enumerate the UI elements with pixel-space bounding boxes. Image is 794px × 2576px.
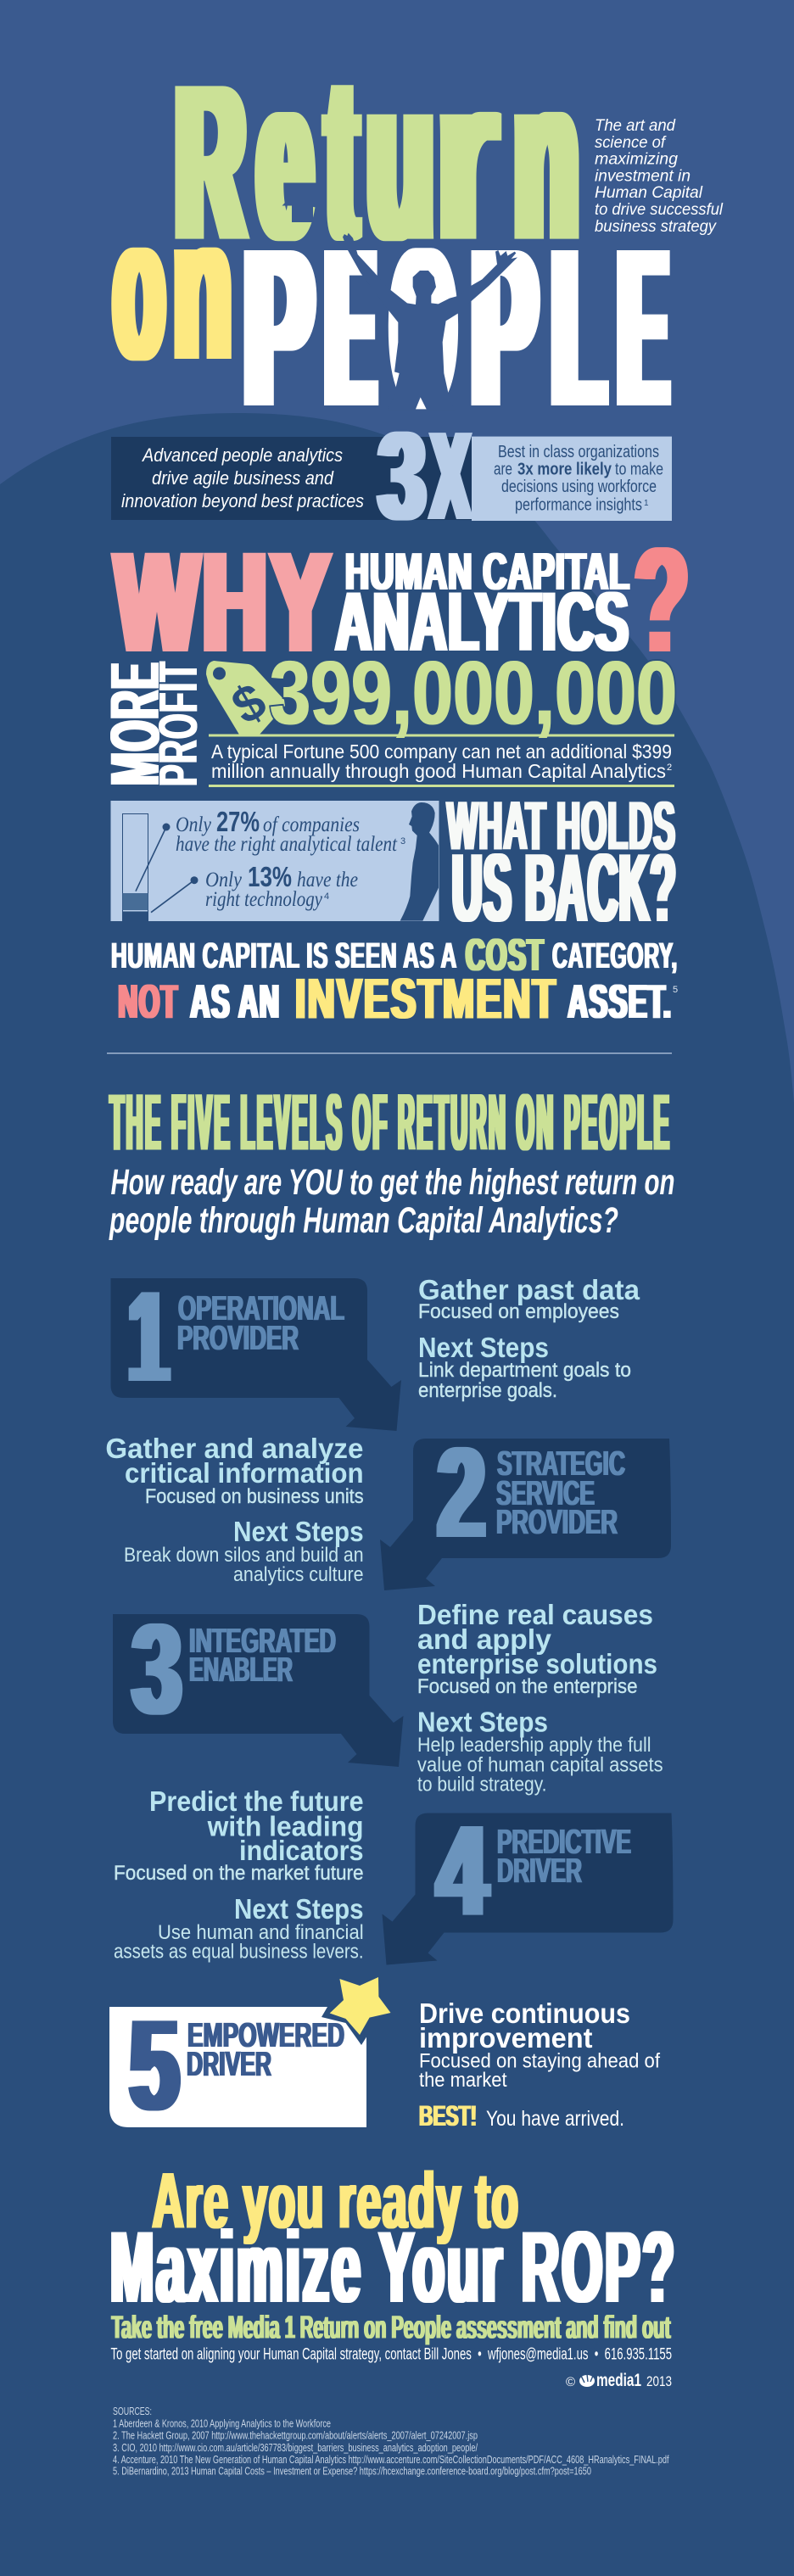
level 5 text: the market — [419, 2069, 507, 2092]
call to action heading — [110, 2156, 677, 2324]
level 5 text: BEST! — [419, 2100, 477, 2132]
heading: Why Human Capital Analytics?: ? — [635, 517, 689, 684]
title word: PEOPLE: E — [327, 202, 373, 454]
panel: what holds us back stats — [110, 801, 439, 921]
profit description with green rules: million annually through good Human Capital Analytics — [211, 760, 666, 782]
level 2 text: Gather and analyze — [105, 1433, 363, 1464]
icon: price tag with dollar sign — [206, 661, 285, 735]
sources: 2. The Hackett Group, 2007 http://www.thehackettgroup.com/about/alerts/alerts_2007/alert_07242007.jsp — [113, 2429, 478, 2442]
level 1 callout: Operational Provider: 1 — [128, 1265, 169, 1409]
title: Return on People: n — [174, 171, 232, 403]
copyright and media1 logo: media1 — [596, 2371, 641, 2390]
advanced analytics text — [121, 444, 364, 511]
rotated label: More Profit — [97, 661, 209, 786]
best in class text: Best in class organizations — [498, 443, 659, 461]
level 4 text: indicators — [239, 1835, 364, 1866]
level 1 callout: Operational Provider — [110, 1265, 401, 1431]
copyright and media1 logo: 2013 — [646, 2373, 672, 2389]
level 2 text: Next Steps — [233, 1516, 364, 1547]
best in class text: 3x more likely — [517, 460, 612, 478]
level 4 text: assets as equal business levers. — [114, 1941, 364, 1964]
level 5 callout: Empowered Driver: EMPOWERED — [187, 2015, 344, 2054]
heading: Why Human Capital Analytics? — [115, 517, 689, 684]
stat text: right technology — [205, 888, 323, 911]
level 2 text: Break down silos and build an — [124, 1544, 364, 1567]
level 3 text: value of human capital assets — [417, 1754, 663, 1777]
title word: Return: u — [368, 25, 433, 289]
subheading question — [109, 1162, 675, 1241]
best in class text: are — [494, 460, 512, 478]
stat text: Only — [176, 813, 212, 836]
level 1 text: enterprise goals. — [418, 1379, 557, 1402]
level 3 callout: Integrated Enabler: INTEGRATED — [189, 1621, 336, 1660]
gauge chart: 13 and 27 percent — [122, 814, 198, 921]
profit description with green rules — [209, 735, 674, 787]
level 2 text: analytics culture — [233, 1563, 364, 1586]
tagline: maximizing — [595, 151, 678, 168]
level 5 text: You have arrived. — [486, 2107, 624, 2131]
level 3 callout: Integrated Enabler: ENABLER — [189, 1650, 293, 1689]
best in class text — [494, 443, 663, 514]
level 5 callout: Empowered Driver — [109, 1977, 390, 2137]
level 1 text: Focused on employees — [418, 1300, 619, 1323]
title word: PEOPLE: L — [553, 202, 604, 454]
profit description with green rules: 2 — [667, 763, 672, 773]
title word: PEOPLE: P — [244, 202, 312, 454]
level 3 text: Next Steps — [417, 1707, 548, 1738]
title word: Return — [176, 25, 578, 289]
infographic page: E — [619, 202, 667, 454]
level 4 callout: Predictive Driver — [382, 1799, 674, 1964]
level 4 callout: Predictive Driver: 4 — [437, 1799, 488, 1943]
best in class text: performance insights — [515, 495, 642, 514]
level 4 text — [114, 1785, 364, 1964]
level 3 callout: Integrated Enabler: 3 — [132, 1597, 182, 1741]
icon: walking person silhouette — [400, 802, 439, 921]
level 3 text: Define real causes — [417, 1599, 653, 1630]
sources: 5. DiBernardino, 2013 Human Capital Costs – Investment or Expense? https://hcexchange.conference-board.org/blog/post.cfm?post=1650 — [113, 2465, 591, 2478]
advanced analytics text: drive agile business and — [152, 467, 334, 489]
sources: SOURCES: — [113, 2405, 152, 2417]
level 4 text: Focused on the market future — [114, 1862, 364, 1885]
title word: PEOPLE: P — [472, 202, 536, 454]
title word: on: o — [114, 171, 165, 403]
stat text: of companies — [263, 813, 360, 836]
stat text: 4 — [324, 891, 329, 902]
level 2 callout: Strategic Service Provider: SERVICE — [496, 1473, 595, 1512]
copyright and media1 logo: © — [566, 2375, 575, 2389]
rotated label: More Profit: MORE — [97, 662, 174, 785]
tagline: to drive successful — [595, 201, 724, 219]
stat text: 13% — [248, 861, 292, 892]
big number: 399,000,000: 399,000,000 — [270, 641, 677, 743]
level 5 text: Focused on staying ahead of — [419, 2050, 660, 2073]
profit description with green rules: A typical Fortune 500 company can net an additional $399 — [211, 740, 672, 763]
statement: cost category, not investment asset: 5 — [673, 985, 678, 995]
level 1 callout: Operational Provider: OPERATIONAL — [178, 1288, 344, 1327]
level 5 text — [419, 1998, 660, 2132]
title word: Return: R — [176, 38, 244, 287]
title: Return on People — [114, 25, 667, 454]
panel: 3X statistic — [111, 406, 672, 546]
statement: cost category, not investment asset: ASSET. — [568, 975, 672, 1029]
level 1 text: Next Steps — [418, 1332, 549, 1363]
statement: cost category, not investment asset: NOT — [119, 975, 178, 1029]
icon: price tag with dollar sign: $ — [222, 672, 275, 735]
stat text: have the right analytical talent — [176, 833, 398, 856]
level 3 text: Focused on the enterprise — [417, 1675, 638, 1698]
level 2 text: critical information — [125, 1457, 364, 1489]
best in class text: decisions using workforce — [501, 478, 657, 496]
level 1 text: Link department goals to — [418, 1359, 631, 1382]
tagline: investment in — [595, 168, 691, 185]
best in class text: 1 — [644, 499, 649, 508]
level 1 callout: Operational Provider: PROVIDER — [177, 1318, 299, 1357]
tagline: science of — [595, 134, 667, 152]
stat text: Only — [205, 869, 243, 891]
statement: cost category, not investment asset: CATEGORY, — [552, 936, 678, 976]
stat text: 27% — [216, 806, 260, 837]
icon: person silhouette with raised arms — [343, 233, 517, 410]
level 3 text: and apply — [417, 1623, 552, 1655]
advanced analytics text: innovation beyond best practices — [121, 490, 364, 511]
level 1 text: Gather past data — [418, 1274, 640, 1305]
level 5 callout: Empowered Driver: DRIVER — [187, 2044, 271, 2083]
tagline — [595, 117, 724, 236]
tagline: business strategy — [595, 218, 717, 236]
sources — [113, 2405, 669, 2478]
level 1 text — [418, 1274, 640, 1402]
level 4 callout: Predictive Driver: PREDICTIVE — [497, 1822, 631, 1861]
level 2 callout: Strategic Service Provider: STRATEGIC — [497, 1444, 625, 1483]
level 2 text — [105, 1433, 364, 1586]
level 3 text: Help leadership apply the full — [417, 1734, 651, 1757]
tagline: The art and — [595, 117, 676, 135]
heading: Why Human Capital Analytics?: HUMAN CAPITAL — [345, 543, 630, 601]
level 5 text: Drive continuous — [419, 1998, 630, 2029]
stat text: 3 — [400, 836, 405, 847]
level 4 text: Next Steps — [234, 1893, 364, 1925]
level 4 text: Use human and financial — [158, 1921, 364, 1944]
advanced analytics text: Advanced people analytics — [141, 444, 343, 466]
level 5 callout: Empowered Driver: 5 — [130, 1993, 179, 2137]
level 4 text: with leading — [207, 1811, 364, 1842]
rotated label: More Profit: PROFIT — [148, 661, 209, 786]
statement: cost category, not investment asset — [111, 930, 678, 1031]
copyright and media1 logo — [566, 2371, 672, 2390]
level 3 text — [417, 1599, 663, 1796]
icon: yellow star — [330, 1977, 390, 2035]
statement: cost category, not investment asset: AS AN — [190, 975, 280, 1029]
level 3 callout: Integrated Enabler — [113, 1597, 404, 1767]
level 4 text: Predict the future — [149, 1785, 364, 1817]
title word: Return: t — [327, 25, 356, 289]
tagline: Human Capital — [595, 184, 703, 202]
best in class text: to make — [615, 460, 663, 478]
level 3 text: to build strategy. — [417, 1773, 546, 1796]
title word: PEOPLE — [244, 202, 667, 454]
level 2 callout: Strategic Service Provider — [380, 1421, 671, 1590]
level 3 text: enterprise solutions — [417, 1648, 657, 1679]
heading: Why Human Capital Analytics?: WHY — [115, 522, 334, 682]
title word: Return: e — [259, 25, 311, 289]
sources: 3. CIO, 2010 http://www.cio.com.au/article/367783/biggest_barriers_business_analytics_adoption_people/ — [113, 2441, 478, 2454]
stat text: have the — [297, 869, 358, 891]
title: Return on People: n — [515, 25, 578, 289]
panel: 3X statistic: X — [431, 406, 470, 546]
level 2 text: Focused on business units — [145, 1485, 364, 1508]
level 5 text: improvement — [419, 2022, 593, 2054]
statement: cost category, not investment asset: INVESTMENT — [295, 967, 557, 1031]
sources: 1 Aberdeen & Kronos, 2010 Applying Analytics to the Workforce — [113, 2417, 331, 2430]
stat text — [176, 806, 405, 911]
statement: cost category, not investment asset: HUMAN CAPITAL IS SEEN AS A — [111, 936, 457, 976]
heading: What holds us back? — [447, 788, 677, 942]
big 3X: 3 — [379, 406, 425, 546]
statement: cost category, not investment asset: COST — [466, 930, 545, 981]
level 4 callout: Predictive Driver: DRIVER — [497, 1851, 582, 1890]
title word: Return: r — [438, 25, 496, 289]
title word: PEOPLE: O — [393, 202, 454, 454]
level 2 callout: Strategic Service Provider: 2 — [438, 1421, 485, 1565]
level 2 callout: Strategic Service Provider: PROVIDER — [496, 1502, 618, 1541]
